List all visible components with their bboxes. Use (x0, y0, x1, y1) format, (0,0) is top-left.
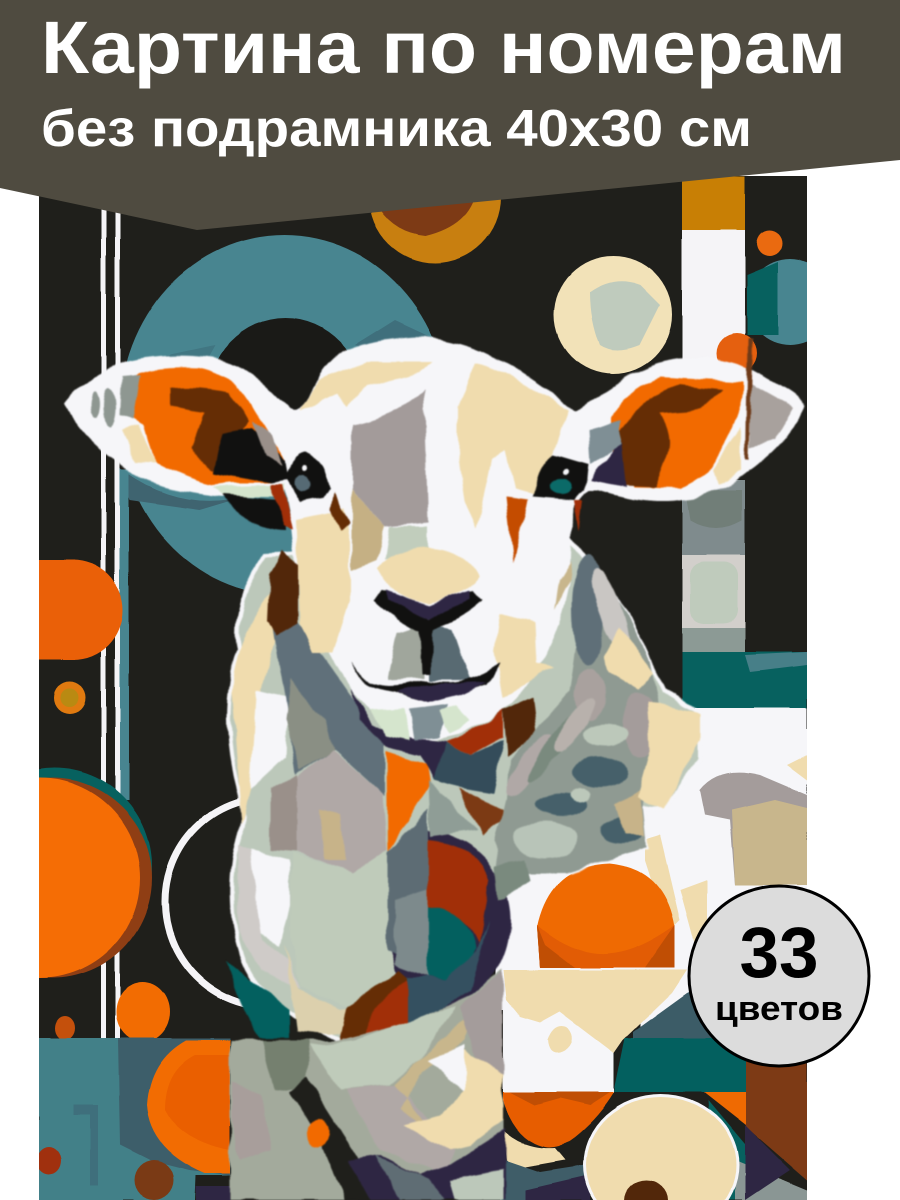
orange half circle (537, 863, 675, 968)
top right circles (716, 230, 807, 369)
title: Картина по номерам (41, 6, 846, 89)
sheep (65, 337, 806, 1200)
badge: 33 colours: 33 (740, 914, 818, 993)
sheep face markings (268, 362, 582, 740)
sheep right ear (588, 340, 794, 488)
right eye (532, 455, 588, 500)
collar (350, 687, 447, 778)
sheep head and ears outline (65, 337, 806, 740)
neck teal patch (226, 960, 290, 1038)
right wool (495, 555, 663, 900)
right vertical column (682, 176, 807, 708)
thin teal bar (120, 470, 129, 800)
lower body (230, 970, 505, 1200)
sheep body (226, 540, 700, 1200)
left eye (285, 452, 329, 502)
sheep left ear (90, 367, 293, 530)
white block lower right (640, 708, 807, 1048)
subtitle: без подрамника 40х30 см (41, 100, 752, 158)
painting background (39, 176, 807, 1200)
fleece base (228, 540, 700, 1040)
badge: 33 colours: цветов (715, 990, 843, 1028)
left orange circles (0, 560, 152, 978)
right grey and beige patch (645, 755, 807, 950)
background shapes (39, 176, 807, 1200)
left wool (232, 580, 400, 1035)
small circles above bottom band (55, 982, 170, 1042)
bottom left band (37, 1038, 230, 1200)
painting: sheep on geometric background (39, 176, 807, 1200)
right beige leg (637, 700, 700, 810)
lower right blocks (500, 960, 807, 1200)
centre chest shapes (340, 697, 537, 1040)
top ochre circle (371, 200, 501, 264)
white ring (165, 797, 375, 1007)
white stripes (101, 208, 120, 1200)
banner background (0, 0, 900, 230)
teal ring behind head (118, 235, 449, 595)
cream circle (554, 256, 672, 374)
badge: 33 colours (689, 886, 869, 1066)
nose and mouth (350, 590, 500, 703)
